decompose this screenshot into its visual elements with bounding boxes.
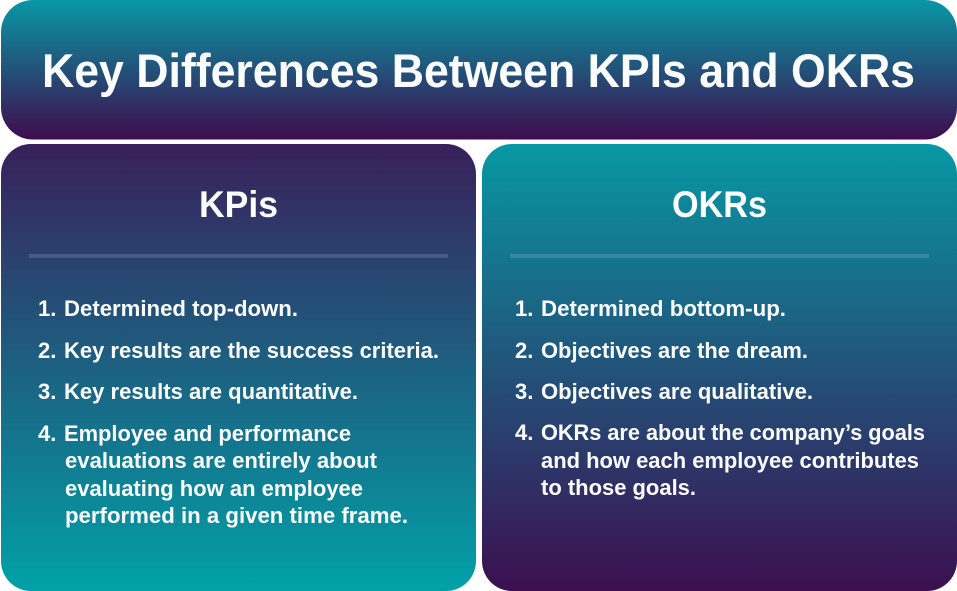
- panel: title banner: [1, 0, 957, 140]
- panel: KPIs: [1, 144, 476, 591]
- list: OKR points: 4.: [515, 420, 533, 445]
- title: Key Differences Between KPIs and OKRs: [42, 44, 915, 97]
- list: OKR points: [515, 296, 925, 500]
- list: OKR points: 1.: [515, 296, 533, 321]
- heading: KPIs: KPis: [199, 184, 278, 225]
- list: KPI points: Determined top-down.: [64, 296, 298, 321]
- list: OKR points: Determined bottom-up.: [541, 296, 786, 321]
- list: KPI points: 3.: [38, 379, 56, 404]
- list: KPI points: Key results are quantitative.: [64, 379, 358, 404]
- list: KPI points: 4.: [38, 421, 56, 446]
- list: KPI points: evaluating how an employee: [65, 476, 363, 501]
- list: KPI points: evaluations are entirely about: [65, 448, 378, 473]
- heading: OKRs: OKRs: [672, 184, 767, 225]
- list: OKR points: and how each employee contributes: [541, 448, 919, 473]
- list: KPI points: Employee and performance: [64, 421, 351, 446]
- list: KPI points: Key results are the success criteria.: [64, 338, 439, 363]
- list: KPI points: performed in a given time frame.: [65, 503, 408, 528]
- list: OKR points: to those goals.: [541, 475, 696, 500]
- list: OKR points: 2.: [515, 338, 533, 363]
- list: OKR points: OKRs are about the company’s goals: [541, 420, 925, 445]
- list: KPI points: 2.: [38, 338, 56, 363]
- list: KPI points: [38, 296, 439, 528]
- panel: OKRs: [482, 144, 957, 591]
- list: OKR points: Objectives are qualitative.: [541, 379, 813, 404]
- list: OKR points: Objectives are the dream.: [541, 338, 808, 363]
- list: OKR points: 3.: [515, 379, 533, 404]
- list: KPI points: 1.: [38, 296, 56, 321]
